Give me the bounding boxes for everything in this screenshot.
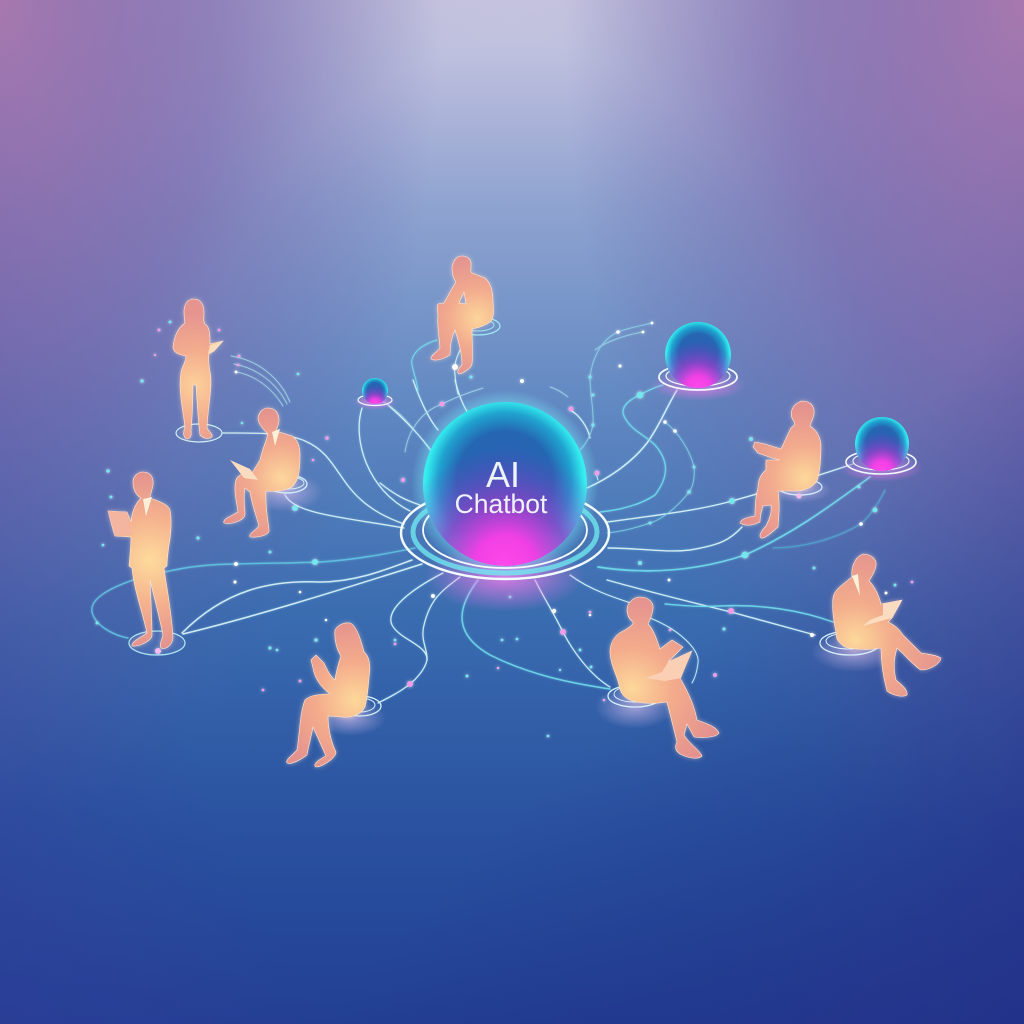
small sphere: upper left xyxy=(353,378,397,410)
central hub rings xyxy=(401,487,609,579)
person: standing woman with tablet xyxy=(173,299,223,442)
sphere label: AI xyxy=(486,454,520,495)
sphere label second line: Chatbot xyxy=(455,489,548,519)
small sphere: far right xyxy=(839,417,923,482)
person: seated man with laptop, left xyxy=(224,408,323,537)
person: seated man, top xyxy=(431,256,500,374)
person: seated woman, lower left xyxy=(287,623,386,767)
central AI Chatbot sphere xyxy=(423,402,587,566)
connection lines xyxy=(92,323,885,703)
small sphere: upper right xyxy=(650,322,746,401)
scattered particle dots xyxy=(96,320,913,737)
person: standing man with tablet xyxy=(108,472,185,655)
person: seated woman, right xyxy=(740,401,832,538)
central hub glow xyxy=(411,390,599,612)
person: seated man with laptop, centre right xyxy=(595,597,719,758)
person: seated man with laptop, far right xyxy=(811,554,941,696)
